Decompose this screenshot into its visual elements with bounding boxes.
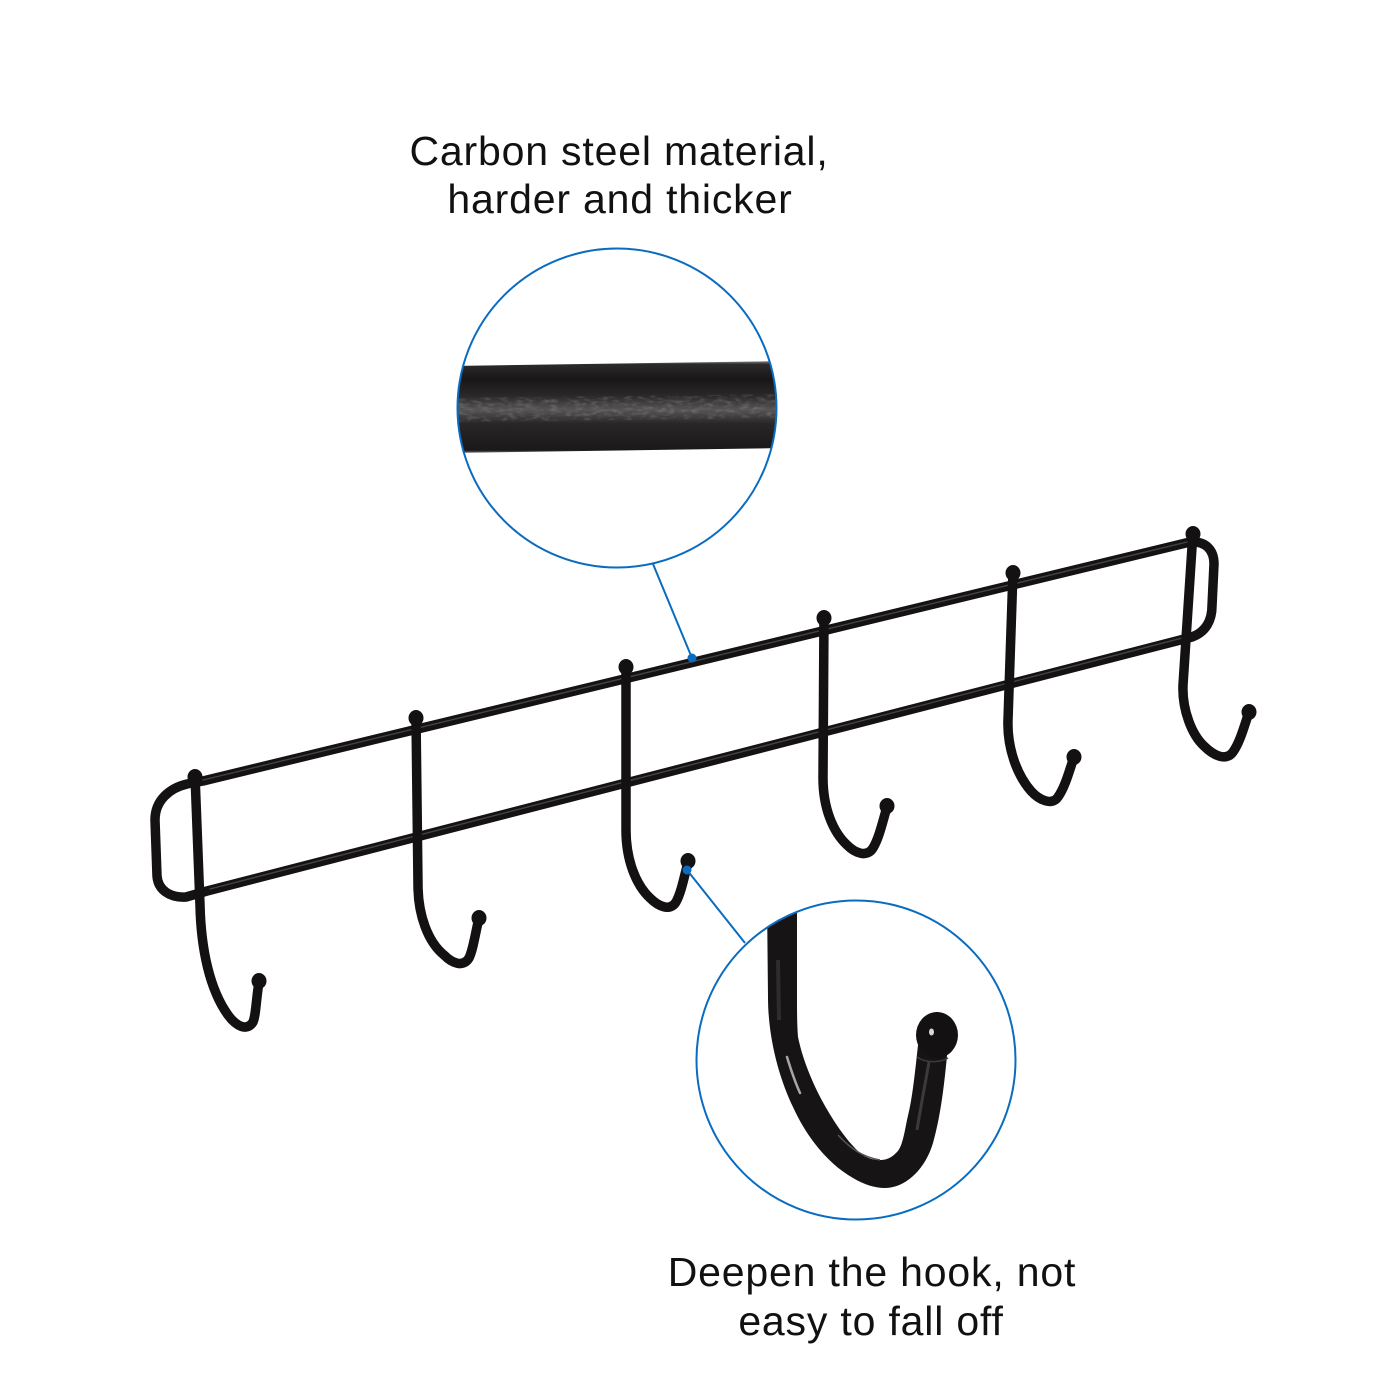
hook 3 — [618, 659, 696, 907]
hook 1 — [188, 769, 266, 1027]
magnifier: deep hook close-up — [682, 866, 1016, 1220]
hook 4 — [816, 610, 894, 854]
heading: carbon steel callout: Carbon steel material, — [409, 128, 829, 174]
heading: carbon steel callout: harder and thicker — [447, 176, 793, 222]
wire frame with two rails — [155, 542, 1214, 897]
heading: deep hook callout: easy to fall off — [738, 1298, 1004, 1344]
magnifier ring — [458, 248, 776, 568]
heading: deep hook callout — [668, 1249, 1076, 1344]
magnifier ring — [696, 900, 1016, 1220]
heading: deep hook callout: Deepen the hook, not — [668, 1249, 1076, 1295]
hook 5 — [1006, 565, 1082, 801]
hook 6 — [1183, 526, 1256, 757]
connector line to hook tip — [682, 866, 745, 943]
magnifier: steel bar close-up — [450, 248, 785, 662]
product: wall-mounted six-hook rack — [155, 526, 1256, 1027]
steel bar detail — [450, 361, 785, 453]
heading: carbon steel callout — [409, 128, 829, 222]
hook detail — [767, 900, 958, 1188]
hook 2 — [408, 710, 486, 964]
connector line to rail — [653, 564, 696, 662]
